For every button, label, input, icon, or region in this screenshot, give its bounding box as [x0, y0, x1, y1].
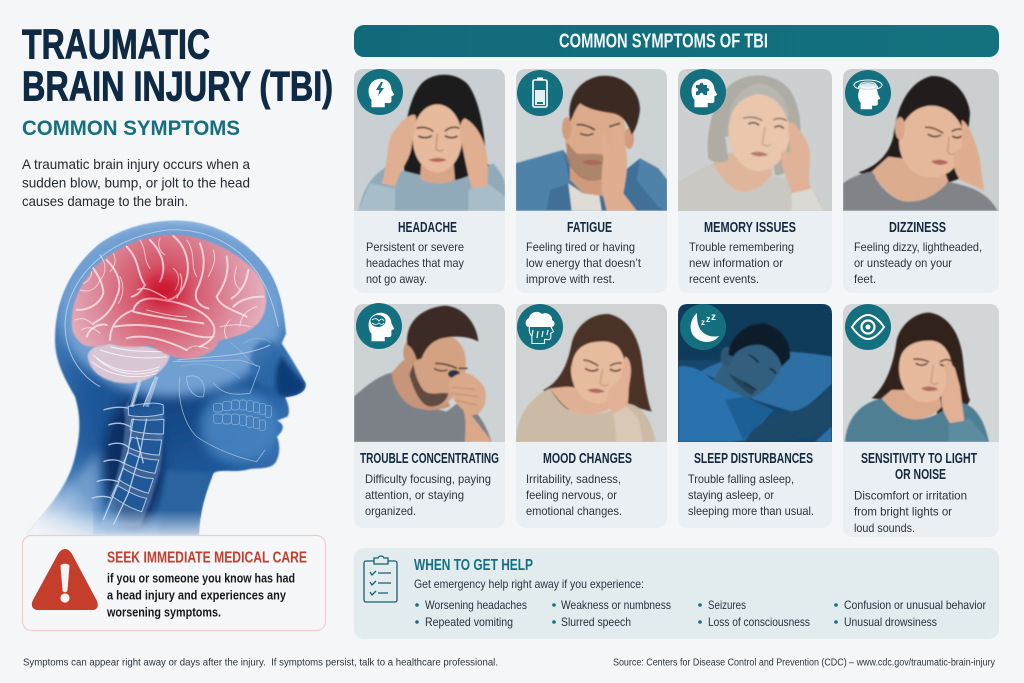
symptom description: loud sounds. [854, 521, 915, 535]
intro text: A traumatic brain injury occurs when a [22, 156, 250, 172]
list: emergency signs: Weakness or numbness [561, 598, 671, 612]
symptom description [526, 240, 642, 286]
symptom description: from bright lights or [854, 504, 952, 518]
icon: warning triangle [32, 549, 98, 610]
subtitle: COMMON SYMPTOMS [22, 117, 240, 140]
symptom description [689, 240, 794, 286]
photo: man pinching bridge of nose [354, 304, 505, 442]
symptom description [854, 488, 967, 535]
photo: older woman touching temple [678, 69, 832, 211]
icon: eye [845, 304, 891, 350]
symptom description [365, 472, 491, 518]
symptom title: OR NOISE [895, 467, 946, 483]
symptom title: TROUBLE CONCENTRATING [360, 451, 499, 467]
card: mood changes [516, 304, 667, 528]
symptom description [526, 472, 622, 518]
symptom title: DIZZINESS [889, 220, 946, 236]
help intro: Get emergency help right away if you experience: [414, 577, 644, 591]
symptom description [688, 472, 814, 518]
section header bar: COMMON SYMPTOMS OF TBI [559, 30, 768, 52]
symptom description: Irritability, sadness, [526, 472, 621, 486]
symptom description [854, 240, 982, 286]
intro text [22, 156, 250, 209]
icon: head with brain [356, 303, 402, 349]
symptom description: emotional changes. [526, 504, 622, 518]
card: sleep disturbances [678, 304, 832, 528]
photo: tired man with hand on face [516, 69, 667, 211]
symptom title: SENSITIVITY TO LIGHT [861, 451, 977, 467]
symptom title: HEADACHE [398, 220, 457, 236]
icon: moon and zzz: z [706, 314, 711, 324]
symptom description: sleeping more than usual. [688, 504, 814, 518]
symptom description: staying asleep, or [688, 488, 774, 502]
list: emergency signs: Confusion or unusual behavior [844, 598, 986, 612]
symptom description [366, 240, 464, 286]
alert box: seek immediate medical care [22, 536, 326, 630]
symptom title: MEMORY ISSUES [704, 220, 796, 236]
symptom description: not go away. [366, 272, 427, 286]
icon: moon and zzz [680, 304, 726, 350]
help heading: WHEN TO GET HELP [414, 557, 533, 574]
symptom description: new information or [689, 256, 783, 270]
card: sensitivity to light or noise [843, 304, 999, 537]
photo: man awake in bed at night [678, 304, 832, 442]
symptom description: Trouble remembering [689, 240, 794, 254]
list: emergency signs: Seizures [708, 598, 746, 612]
symptom title: MOOD CHANGES [543, 451, 632, 467]
card: trouble concentrating [354, 303, 505, 528]
list: emergency signs: Slurred speech [561, 615, 631, 629]
icon: head with dizzy rings [845, 70, 891, 116]
alert text: if you or someone you know has had [107, 572, 295, 586]
symptom description: improve with rest. [526, 272, 615, 286]
photo: woman holding head [843, 69, 999, 211]
icon: head with rain cloud [517, 304, 563, 350]
symptom description: Trouble falling asleep, [688, 472, 794, 486]
card: fatigue [516, 69, 667, 293]
card: memory issues [678, 69, 832, 293]
icon: low battery [517, 70, 563, 116]
icon: moon and zzz: z [701, 318, 705, 327]
symptom description: low energy that doesn’t [526, 256, 642, 270]
symptom description: recent events. [689, 272, 759, 286]
list: emergency signs: Unusual drowsiness [844, 615, 937, 629]
symptom description: Discomfort or irritation [854, 488, 967, 502]
symptom description: Feeling dizzy, lightheaded, [854, 240, 982, 254]
symptom title: SLEEP DISTURBANCES [694, 451, 813, 467]
section header bar [354, 25, 999, 57]
photo: woman rubbing eye [843, 304, 999, 442]
title: BRAIN INJURY (TBI) [22, 62, 333, 110]
photo: sad woman leaning on hand [516, 304, 667, 442]
spine [100, 380, 164, 527]
symptom title [861, 451, 977, 483]
symptom description: headaches that may [366, 256, 464, 270]
icon: moon and zzz: z [711, 312, 716, 323]
symptom description: feet. [854, 272, 876, 286]
card: dizziness [843, 69, 999, 293]
list: emergency signs: Loss of consciousness [708, 615, 810, 629]
intro text: causes damage to the brain. [22, 193, 188, 209]
symptom description: Feeling tired or having [526, 240, 635, 254]
symptom description: Difficulty focusing, paying [365, 472, 491, 486]
title [22, 20, 333, 110]
icon: clipboard checklist [364, 556, 397, 602]
symptom description: feeling nervous, or [526, 488, 617, 502]
intro text: sudden blow, bump, or jolt to the head [22, 174, 250, 190]
alert heading: SEEK IMMEDIATE MEDICAL CARE [107, 550, 307, 566]
photo: woman holding temples [354, 69, 505, 211]
list: emergency signs [415, 598, 986, 629]
alert text: worsening symptoms. [106, 606, 221, 620]
icon: head with lightning bolt [357, 69, 403, 115]
illustration: x-ray head with highlighted brain [20, 221, 306, 537]
icon: head with puzzle piece [680, 69, 726, 115]
symptom description: Persistent or severe [366, 240, 464, 254]
alert text: a head injury and experiences any [107, 588, 286, 602]
teeth [213, 400, 271, 431]
symptom description: attention, or staying [365, 488, 464, 502]
symptom description: organized. [365, 504, 416, 518]
alert text [106, 572, 295, 620]
skull lines [65, 230, 278, 387]
footer note: Symptoms can appear right away or days after the injury. If symptoms persist, talk to a healthcare professional. [23, 658, 498, 668]
brain [72, 235, 266, 407]
card: headache [354, 69, 505, 293]
title: TRAUMATIC [22, 20, 210, 68]
symptom title: FATIGUE [567, 220, 612, 236]
list: emergency signs: Worsening headaches [425, 598, 527, 612]
panel: when to get help [354, 548, 999, 639]
symptom description: or unsteady on your [854, 256, 952, 270]
list: emergency signs: Repeated vomiting [425, 615, 513, 629]
